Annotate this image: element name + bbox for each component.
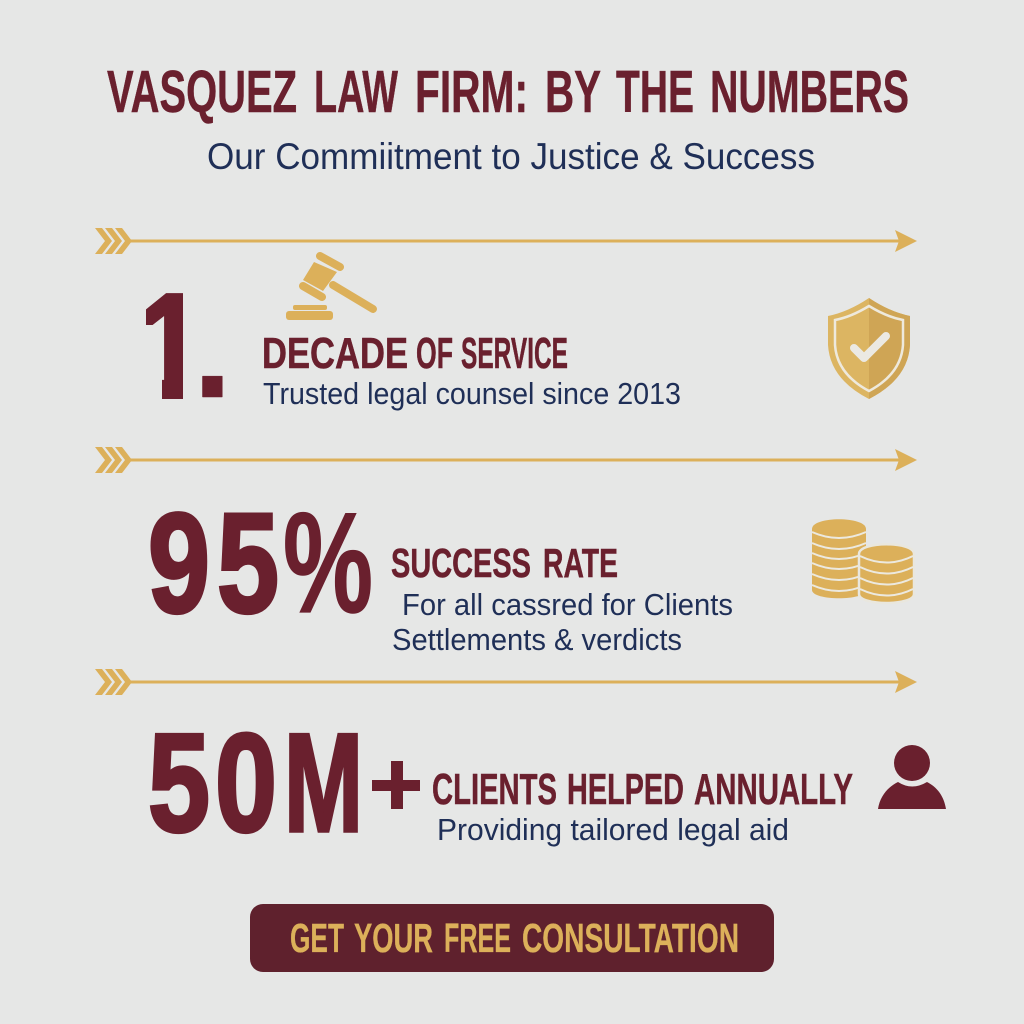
heading: success rate: RATE: [543, 540, 618, 586]
stat number: 50M: 5: [148, 704, 210, 861]
call to action button: FREE: [444, 915, 511, 961]
title: [107, 59, 909, 125]
heading: decade of service: OF: [416, 329, 453, 378]
stat number: 1.: 1: [138, 264, 204, 429]
description: success rate: For all cassred for Clients: [402, 587, 733, 622]
stat number: 50M: 0: [215, 704, 277, 861]
stat number: 95%: 9: [148, 484, 210, 643]
call to action button: YOUR: [354, 915, 433, 961]
subtitle: Our Commiitment to Justice & Success: [207, 136, 815, 177]
heading: clients helped annually: HELPED: [567, 765, 684, 814]
call to action button: [250, 904, 774, 972]
icon: shield with check: [828, 298, 910, 399]
title: NUMBERS: [710, 59, 909, 125]
description: success rate: [392, 587, 733, 657]
stat number: 95%: %: [283, 484, 373, 643]
stat number: 95%: 5: [217, 484, 279, 643]
stat number: 1.: [146, 293, 222, 399]
stat number: 50M: [148, 704, 363, 861]
call to action button: GET: [290, 915, 344, 961]
title: THE: [616, 59, 694, 125]
heading: clients helped annually: [432, 765, 853, 814]
icon: coin stacks: [812, 519, 914, 603]
title: FIRM:: [415, 59, 528, 125]
icon: person: [878, 745, 946, 809]
description: success rate: Settlements & verdicts: [392, 622, 682, 657]
description: decade of service: Trusted legal counsel since 2013: [263, 376, 681, 411]
description: clients helped: Providing tailored legal aid: [437, 812, 789, 847]
heading: clients helped annually: CLIENTS: [432, 765, 557, 814]
heading: decade of service: DECADE: [262, 329, 408, 378]
panel: decade of service: [138, 256, 910, 429]
stat number: 50M: M: [284, 704, 363, 861]
panel: success rate: [148, 484, 914, 657]
stat number: 1.: .: [193, 270, 232, 427]
stat number: 95%: [148, 484, 373, 643]
stat plus sign: [372, 761, 420, 809]
arrow divider 2: [95, 447, 917, 473]
heading: clients helped annually: ANNUALLY: [694, 765, 853, 814]
panel: clients helped: [148, 704, 946, 861]
call to action button: CONSULTATION: [522, 915, 739, 961]
title: VASQUEZ: [107, 59, 297, 125]
arrow divider 1: [95, 228, 917, 254]
icon: gavel: [286, 256, 373, 320]
heading: decade of service: [262, 329, 568, 378]
title: BY: [545, 59, 601, 125]
arrow divider 3: [95, 669, 917, 695]
heading: decade of service: SERVICE: [461, 329, 568, 378]
title: LAW: [314, 59, 398, 125]
heading: success rate: SUCCESS: [391, 540, 531, 586]
